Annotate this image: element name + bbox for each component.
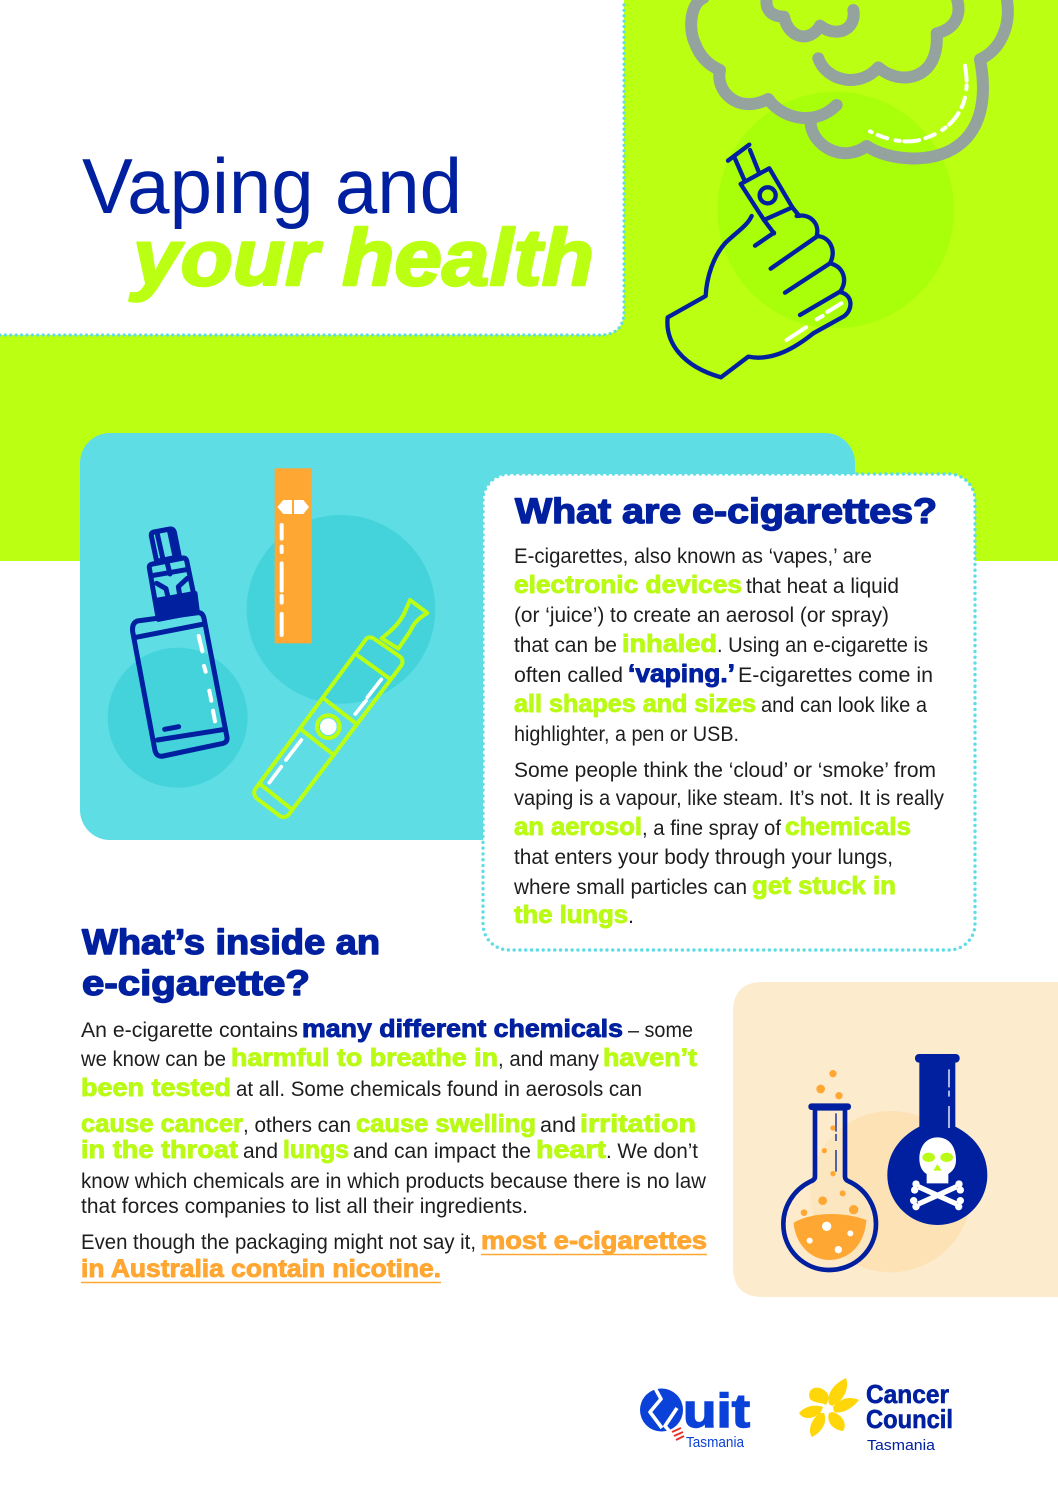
icon: hand — [667, 216, 850, 377]
dotted border of title panel — [0, 0, 624, 335]
icon: daffodil — [799, 1378, 859, 1437]
text block: chemicals paragraph: . We don’t — [606, 1139, 698, 1163]
text block: chemicals paragraph: and can impact the — [353, 1139, 531, 1163]
illustration: e-cigarette devices — [108, 468, 435, 817]
icon: vapour cloud — [691, 0, 1008, 158]
text block: aerosol paragraph — [513, 758, 944, 929]
panel: cream illustration — [733, 982, 1058, 1297]
text block: aerosol paragraph: vaping is a vapour, like steam. It’s not. It is really — [514, 786, 944, 810]
logo: Cancer Council Tasmania: Council — [866, 1404, 953, 1434]
text block: aerosol paragraph: the lungs — [514, 901, 628, 929]
icon: navy box mod — [133, 529, 227, 756]
text block: aerosol paragraph: that enters your body through your lungs, — [514, 845, 893, 869]
icon: orange liquid flask — [783, 1070, 876, 1270]
title: your health — [129, 213, 594, 302]
text block: aerosol paragraph: Some people think the ‘cloud’ or ‘smoke’ from — [514, 758, 936, 782]
text block: chemicals paragraph: we know can be — [80, 1047, 226, 1071]
heading: what's inside — [82, 923, 380, 1003]
text block: definition paragraph: all shapes and sizes — [514, 690, 756, 718]
text block: definition paragraph: often called — [514, 663, 623, 687]
text block: definition paragraph: that can be — [514, 633, 617, 657]
text block: definition paragraph: electronic devices — [514, 571, 742, 599]
icon: hand highlight — [787, 303, 841, 340]
title — [82, 142, 594, 302]
text block: chemicals paragraph: cause cancer — [81, 1110, 243, 1138]
text block: definition paragraph — [514, 544, 933, 746]
text block: nicotine callout — [81, 1227, 707, 1283]
logo: Quit Tasmania: Tasmania — [686, 1435, 745, 1451]
text block: aerosol paragraph: , a fine spray of — [642, 816, 781, 840]
icon: orange pod vape — [275, 468, 312, 643]
text block: chemicals paragraph: and — [540, 1113, 576, 1137]
icon: poison flask with skull — [887, 1054, 987, 1225]
text block: chemicals paragraph: at all. Some chemicals found in aerosols can — [236, 1077, 642, 1101]
icon: cloud highlight — [870, 66, 967, 141]
text block: chemicals paragraph: and — [243, 1139, 278, 1163]
text block: chemicals paragraph: know which chemicals are in which products because there is no law — [81, 1169, 706, 1193]
text block: aerosol paragraph: where small particles can — [513, 875, 747, 899]
icon: skull — [910, 1137, 964, 1210]
panel: teal illustration — [80, 433, 855, 840]
illustration: flasks — [783, 1054, 987, 1272]
text block: definition paragraph: inhaled — [622, 630, 717, 658]
text block: chemicals paragraph: , others can — [243, 1113, 351, 1137]
icon: lime pen vape — [254, 600, 427, 817]
text block: definition paragraph: and can look like a — [761, 693, 927, 717]
text block: definition paragraph: (or ‘juice’) to create an aerosol (or spray) — [514, 603, 889, 627]
text block: chemicals paragraph: – some — [628, 1018, 693, 1042]
text block: chemicals paragraph: been tested — [81, 1074, 231, 1102]
text block: nicotine callout: Even though the packaging might not say it, — [81, 1230, 476, 1254]
text block: chemicals paragraph: lungs — [283, 1136, 349, 1164]
text block: chemicals paragraph: many different chemicals — [302, 1015, 623, 1043]
text block: aerosol paragraph: chemicals — [785, 813, 911, 841]
logo: Quit Tasmania — [640, 1384, 750, 1451]
logo: Cancer Council Tasmania: Cancer — [866, 1379, 949, 1409]
text block: chemicals paragraph: cause swelling — [356, 1110, 536, 1138]
text block: definition paragraph: E-cigarettes, also known as ‘vapes,’ are — [514, 544, 872, 568]
text block: chemicals paragraph: An e-cigarette contains — [81, 1018, 298, 1042]
icon: box mod highlight — [199, 636, 215, 721]
title: Vaping and — [82, 142, 462, 230]
text block: chemicals paragraph: heart — [536, 1136, 607, 1164]
text block: definition paragraph: that heat a liquid — [746, 574, 899, 598]
text block: chemicals paragraph: haven’t — [603, 1044, 698, 1072]
panel: what are e-cigarettes — [483, 474, 975, 950]
heading: what's inside: e-cigarette? — [82, 964, 310, 1003]
text block: chemicals paragraph — [80, 1015, 706, 1218]
text block: aerosol paragraph: get stuck in — [752, 872, 896, 900]
text block: chemicals paragraph: , and many — [498, 1047, 599, 1071]
text block: nicotine callout: in Australia contain nicotine. — [81, 1255, 441, 1283]
text block: aerosol paragraph: . — [628, 904, 634, 928]
heading: what are e-cigarettes: What are e-cigarettes? — [515, 492, 937, 531]
heading: what's inside: What’s inside an — [82, 923, 380, 962]
text block: chemicals paragraph: harmful to breathe in — [231, 1044, 498, 1072]
logo: Quit Tasmania: uit — [683, 1384, 750, 1437]
text block: chemicals paragraph: irritation — [580, 1110, 696, 1138]
illustration: hand holding vape with cloud — [667, 0, 1008, 377]
text block: definition paragraph: . Using an e-cigarette is — [717, 633, 928, 657]
icon: vape device in hand — [728, 145, 799, 233]
text block: definition paragraph: ‘vaping.’ — [628, 660, 735, 688]
text block: chemicals paragraph: in the throat — [81, 1136, 239, 1164]
text block: aerosol paragraph: an aerosol — [514, 813, 642, 841]
text block: definition paragraph: highlighter, a pen or USB. — [514, 722, 739, 746]
text block: nicotine callout: most e-cigarettes — [481, 1227, 707, 1255]
text block: definition paragraph: E-cigarettes come in — [738, 663, 933, 687]
panel: lime header background — [0, 0, 1058, 561]
icon: Quit Q mark — [640, 1388, 684, 1440]
icon: pen highlight — [269, 679, 381, 783]
logo: Cancer Council Tasmania — [799, 1378, 953, 1454]
logo: Cancer Council Tasmania: Tasmania — [867, 1437, 936, 1454]
text block: chemicals paragraph: that forces companies to list all their ingredients. — [81, 1194, 528, 1218]
